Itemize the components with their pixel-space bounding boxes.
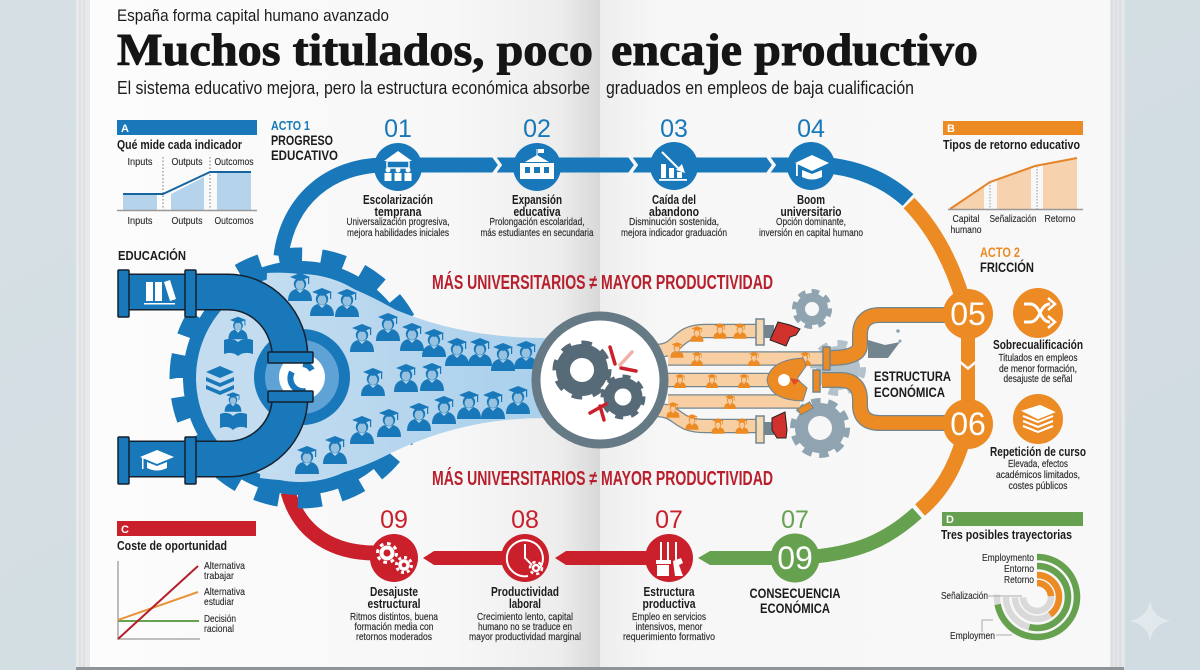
friction item: sobrecualificación: desajuste de señal bbox=[1004, 373, 1072, 385]
icon: stack of books bbox=[1023, 406, 1053, 432]
step 03 bbox=[621, 115, 727, 239]
step consecuencia económica: 09 bbox=[777, 540, 813, 576]
panel D radial chart: Señalización bbox=[941, 590, 988, 602]
readers and book icons inside gear bbox=[206, 317, 253, 430]
act 2 label bbox=[980, 245, 1034, 275]
icon: gears bbox=[378, 544, 412, 572]
funnel of graduates bbox=[260, 273, 547, 480]
education label: EDUCACIÓN bbox=[118, 248, 186, 263]
step 01 bbox=[346, 115, 450, 239]
blue flow path bbox=[281, 154, 908, 256]
step 09 red: Ritmos distintos, buena bbox=[350, 611, 438, 623]
panel C chart: trabajar bbox=[204, 570, 234, 582]
panel B chart: Retorno bbox=[1044, 213, 1076, 225]
step 08 red: Crecimiento lento, capital bbox=[477, 611, 573, 623]
step 09 red: formación media con bbox=[354, 621, 434, 633]
panel B chart: humano bbox=[950, 224, 982, 236]
act 2 label: FRICCIÓN bbox=[980, 258, 1034, 275]
panel C chart: Decisión bbox=[204, 613, 236, 625]
panel D header bar: D bbox=[946, 514, 954, 526]
panel C title: Coste de oportunidad bbox=[117, 538, 227, 553]
panel A chart: Outputs bbox=[172, 215, 202, 227]
act 1 label: PROGRESO bbox=[271, 132, 333, 148]
panel B chart: Señalización bbox=[990, 213, 1037, 225]
step consecuencia económica: 07 bbox=[781, 506, 809, 534]
act 2 label: ACTO 2 bbox=[980, 245, 1020, 260]
panel B: tipos de retorno educativo bbox=[943, 121, 1083, 236]
header: title: encaje productivo bbox=[611, 25, 978, 75]
panel A header bar: A bbox=[121, 123, 129, 135]
panel A chart: Outcomos bbox=[214, 215, 254, 227]
flanges and red rags bbox=[756, 319, 800, 443]
step 09 red: retornos moderados bbox=[356, 631, 432, 643]
act 1 label bbox=[271, 118, 338, 163]
step 02: más estudiantes en secundaria bbox=[480, 227, 594, 239]
step 02: Expansión bbox=[512, 192, 562, 207]
step 04 bbox=[759, 115, 863, 239]
step 01: Universalización progresiva, bbox=[346, 216, 450, 228]
step 08 red: 08 bbox=[511, 506, 539, 534]
step 07 red: Empleo en servicios bbox=[632, 611, 706, 623]
step consecuencia económica bbox=[750, 506, 840, 616]
icon: graduation cap bbox=[795, 155, 829, 180]
friction item: sobrecualificación: Titulados en empleos bbox=[998, 352, 1078, 364]
orange flow path bbox=[909, 203, 977, 510]
node 05 bbox=[943, 289, 993, 339]
header: subtitle: El sistema educativo mejora, pero la estructura económica absorbe bbox=[117, 78, 590, 98]
gears bbox=[556, 344, 643, 417]
panel B header bar: B bbox=[947, 123, 955, 135]
icon: school with children bbox=[384, 151, 412, 181]
central broken gear circle bbox=[536, 316, 664, 444]
warning text bottom: MÁS UNIVERSITARIOS ≠ MAYOR PRODUCTIVIDAD bbox=[432, 467, 773, 490]
step 07 red: requerimiento formativo bbox=[623, 631, 715, 643]
step 03: Disminución sostenida, bbox=[629, 216, 719, 228]
gray gears behind pipes bbox=[793, 292, 863, 455]
step 04: Boom bbox=[797, 192, 825, 207]
act 1 label: ACTO 1 bbox=[271, 118, 310, 133]
cracked orange pipes bbox=[656, 331, 825, 426]
panel B title: Tipos de retorno educativo bbox=[943, 137, 1080, 152]
step 04: Opción dominante, bbox=[776, 216, 846, 228]
step 02 bbox=[480, 115, 594, 239]
act 1 label: EDUCATIVO bbox=[271, 147, 338, 163]
friction item: repetición de curso: académicos limitados, bbox=[996, 469, 1080, 481]
bottom flow bands bbox=[423, 513, 917, 565]
panel C chart bbox=[118, 560, 245, 639]
small orange graduates in pipes bbox=[666, 323, 811, 434]
panel D: tres posibles trayectorias bbox=[941, 512, 1083, 642]
flow chevrons bbox=[492, 154, 774, 176]
step 01: temprana bbox=[374, 204, 422, 219]
friction item: sobrecualificación: de menor formación, bbox=[999, 363, 1077, 375]
panel A chart bbox=[117, 156, 257, 227]
icon: clock and gear bbox=[507, 540, 543, 576]
step 07 red: 07 bbox=[655, 506, 683, 534]
orange pipe junction bbox=[767, 329, 902, 415]
warning text top: MÁS UNIVERSITARIOS ≠ MAYOR PRODUCTIVIDAD bbox=[432, 271, 773, 294]
step 04: universitario bbox=[780, 204, 842, 219]
orange outlet pipes bbox=[822, 315, 950, 423]
step 08 red: mayor productividad marginal bbox=[469, 631, 581, 643]
node 06 bbox=[943, 399, 993, 449]
panel C: coste de oportunidad bbox=[117, 521, 256, 639]
panel D radial chart: Entorno bbox=[1004, 563, 1034, 575]
icon: books bbox=[144, 280, 176, 304]
step 09 red: Desajuste bbox=[370, 584, 418, 599]
panel A chart: Inputs bbox=[128, 215, 152, 227]
icon: shuffle bbox=[1024, 298, 1055, 328]
step 01: Escolarización bbox=[363, 192, 433, 207]
step 07 red bbox=[623, 506, 715, 643]
panel C chart: Alternativa bbox=[204, 586, 245, 598]
hub bbox=[254, 329, 350, 425]
panel C chart: Alternativa bbox=[204, 560, 245, 572]
step 03: mejora indicador graduación bbox=[621, 227, 727, 239]
step 02: educativa bbox=[514, 204, 561, 219]
panel C chart: estudiar bbox=[204, 596, 234, 608]
panel B chart: Capital bbox=[952, 213, 980, 225]
panel D title: Tres posibles trayectorias bbox=[941, 527, 1072, 542]
step 08 red: laboral bbox=[509, 596, 541, 611]
step consecuencia económica: ECONÓMICA bbox=[760, 599, 830, 616]
sparks bbox=[590, 347, 636, 420]
panel A chart: Inputs bbox=[128, 156, 152, 168]
icon: falling bar chart bbox=[659, 152, 687, 181]
panel D radial chart: Retorno bbox=[1004, 574, 1034, 586]
header: title: Muchos titulados, poco bbox=[117, 25, 593, 75]
panel D radial chart: Employmento bbox=[982, 552, 1034, 564]
main gear bbox=[177, 255, 423, 501]
step 04: 04 bbox=[797, 115, 825, 143]
step 01: mejora habilidades iniciales bbox=[347, 227, 449, 239]
decorative sparkle bbox=[1129, 601, 1171, 641]
icon: cap on pipe bbox=[140, 450, 174, 470]
step 07 red: intensivos, menor bbox=[636, 621, 703, 633]
label: estructura económica bbox=[874, 369, 951, 400]
friction item: repetición de curso bbox=[990, 394, 1086, 492]
step 04: inversión en capital humano bbox=[759, 227, 863, 239]
panel A chart: Outputs bbox=[172, 156, 202, 168]
panel C header bar: C bbox=[121, 524, 129, 536]
friction item: sobrecualificación bbox=[993, 288, 1083, 385]
step 03: abandono bbox=[649, 204, 699, 219]
icon: factory tools bbox=[656, 542, 683, 576]
panel B chart bbox=[948, 158, 1083, 236]
step 08 red bbox=[469, 506, 581, 643]
header: title bbox=[117, 25, 978, 75]
step 02: 02 bbox=[523, 115, 551, 143]
step 09 red bbox=[350, 506, 438, 643]
panel A chart: Outcomos bbox=[214, 156, 254, 168]
step 08 red: Productividad bbox=[491, 584, 559, 599]
node 05: 05 bbox=[950, 296, 986, 332]
label: estructura económica: ESTRUCTURA bbox=[874, 369, 951, 384]
step 07 red: Estructura bbox=[644, 584, 695, 599]
step 03: 03 bbox=[660, 115, 688, 143]
panel C chart: racional bbox=[204, 623, 234, 635]
panel D radial chart: Employmen bbox=[950, 630, 995, 642]
panel D header bar bbox=[942, 512, 1083, 526]
step 09 red: 09 bbox=[380, 506, 408, 534]
step 02: Prolongación escolaridad, bbox=[490, 216, 584, 228]
panel A title: Qué mide cada indicador bbox=[117, 137, 242, 152]
header: kicker: España forma capital humano avanzado bbox=[117, 7, 389, 25]
U-shaped blue pipe bbox=[118, 270, 313, 484]
step 01: 01 bbox=[384, 115, 412, 143]
step 03: Caída del bbox=[652, 192, 696, 207]
step consecuencia económica: CONSECUENCIA bbox=[750, 585, 840, 601]
node 06: 06 bbox=[950, 406, 986, 442]
label: estructura económica: ECONÓMICA bbox=[874, 385, 945, 400]
header: subtitle: graduados en empleos de baja cualificación bbox=[606, 78, 914, 98]
panel D radial chart bbox=[941, 552, 1077, 642]
panel A: qué mide cada indicador bbox=[117, 120, 257, 227]
header: subtitle bbox=[117, 78, 914, 98]
friction item: repetición de curso: costes públicos bbox=[1008, 480, 1068, 492]
red flow start bbox=[288, 492, 375, 553]
step 09 red: estructural bbox=[368, 596, 420, 611]
friction item: repetición de curso: Repetición de curso bbox=[990, 444, 1086, 459]
friction item: sobrecualificación: Sobrecualificación bbox=[993, 337, 1083, 352]
step 08 red: humano no se traduce en bbox=[478, 621, 572, 633]
icon: school building bbox=[520, 149, 554, 179]
graduates icons bbox=[288, 273, 538, 474]
friction item: repetición de curso: Elevada, efectos bbox=[1008, 458, 1068, 470]
step 07 red: productiva bbox=[642, 596, 696, 611]
